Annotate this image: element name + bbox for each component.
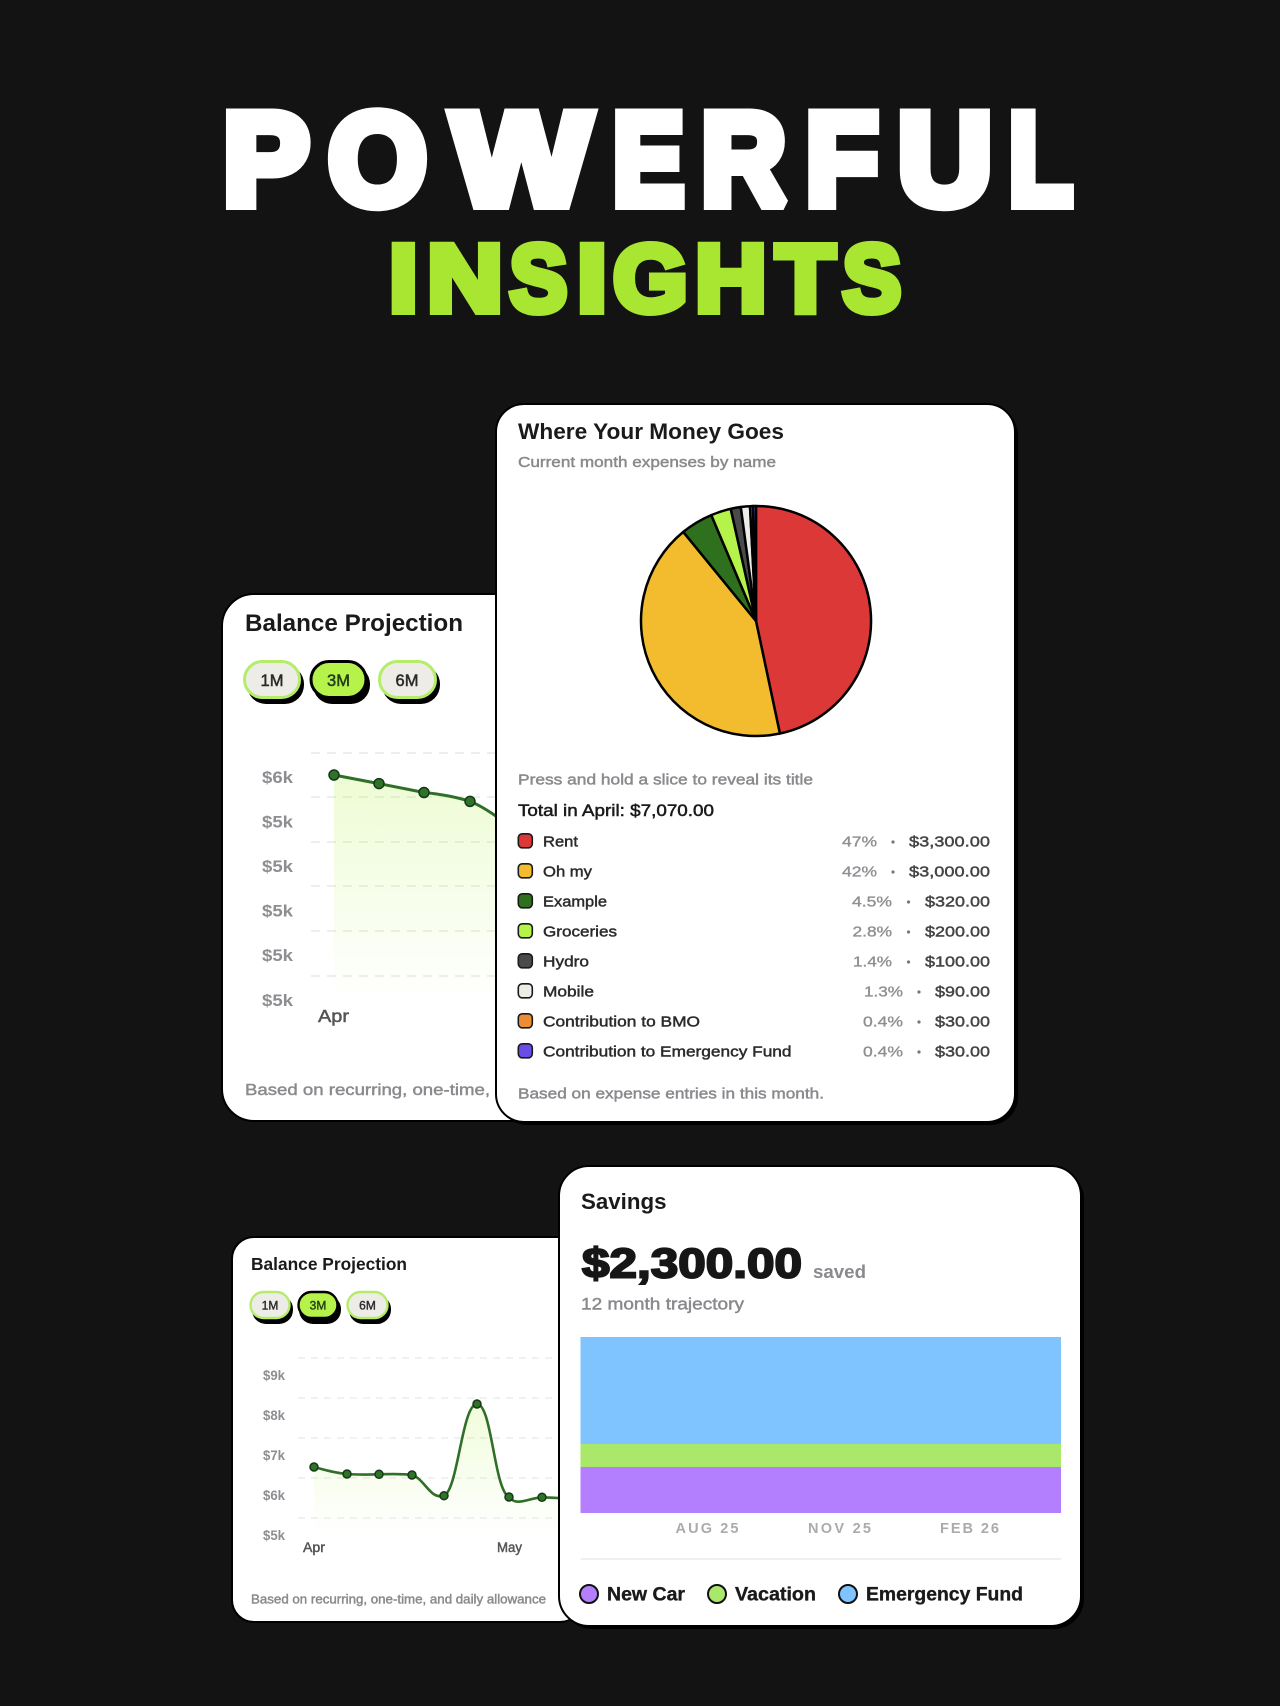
saved amount: $2,300.00	[582, 1240, 802, 1286]
line chart: three month balance: Apr	[318, 1006, 349, 1026]
legend row: contribution to emergency fund	[518, 1044, 990, 1060]
expense legend	[518, 834, 990, 1060]
savings legend: Emergency Fund	[866, 1584, 1023, 1606]
heading: powerful: E	[613, 86, 684, 232]
stacked area chart: NOV 25	[808, 1521, 871, 1537]
line chart: three month balance: May	[497, 1540, 522, 1555]
panel: balance projection small	[232, 1237, 582, 1622]
legend row: rent: Rent	[543, 834, 579, 850]
panel: savings	[559, 1166, 1084, 1629]
heading: insights: S	[510, 226, 567, 332]
heading: powerful: W	[453, 86, 590, 232]
heading: powerful: U	[898, 86, 992, 232]
range selector pills: 1M	[261, 672, 283, 690]
heading: insights: G	[613, 226, 688, 332]
range selector pills: 6M	[396, 672, 418, 690]
line chart: three month balance: $5k	[263, 1528, 285, 1543]
savings legend	[580, 1584, 1023, 1606]
legend row: oh my	[518, 864, 990, 880]
line chart: three month balance: $6k	[263, 1488, 285, 1503]
heading: insights: I	[577, 226, 607, 332]
legend row: contribution to emergency fund: 0.4%	[863, 1044, 903, 1060]
legend row: example: $320.00	[925, 894, 990, 910]
line chart: three month balance: $5k	[262, 946, 294, 965]
line chart: three month balance: $7k	[263, 1448, 285, 1463]
legend row: groceries: 2.8%	[852, 924, 892, 940]
trajectory label: 12 month trajectory	[581, 1294, 745, 1314]
savings legend: Vacation	[735, 1584, 816, 1606]
legend row: rent	[518, 834, 990, 850]
footnote: Based on recurring, one-time,	[245, 1082, 490, 1099]
panel: where your money goes	[496, 404, 1018, 1125]
heading: insights: T	[776, 226, 835, 332]
saved label: saved	[813, 1262, 866, 1282]
legend row: rent: 47%	[842, 834, 877, 850]
legend row: oh my: Oh my	[543, 864, 593, 880]
stacked area chart: AUG 25	[676, 1521, 738, 1537]
heading: powerful: L	[1009, 86, 1072, 232]
legend row: groceries	[518, 924, 990, 940]
savings legend: New Car	[607, 1584, 686, 1606]
legend row: mobile: $90.00	[935, 984, 990, 1000]
legend row: mobile	[518, 984, 990, 1000]
footnote: Based on expense entries in this month.	[518, 1086, 824, 1102]
heading: powerful: O	[328, 86, 427, 232]
legend row: mobile: 1.3%	[864, 984, 903, 1000]
legend row: rent: $3,300.00	[909, 834, 990, 850]
legend row: oh my: 42%	[842, 864, 877, 880]
range selector pills: 3M	[327, 672, 350, 690]
total: Total in April: $7,070.00	[518, 801, 714, 820]
range selector pills: 1M	[262, 1298, 278, 1312]
range selector pills	[244, 662, 440, 704]
legend row: example: Example	[543, 894, 607, 910]
line chart: three month balance	[262, 753, 500, 1026]
heading: powerful: P	[223, 86, 309, 232]
range selector pills: 3M	[310, 1298, 326, 1312]
heading: insights: I	[389, 226, 418, 332]
range selector pills: 6M	[359, 1298, 376, 1312]
heading: insights: S	[843, 226, 901, 332]
hint text: Press and hold a slice to reveal its title	[518, 772, 813, 788]
range selector pills	[250, 1292, 391, 1324]
legend row: hydro: Hydro	[543, 954, 589, 970]
legend row: contribution to bmo	[518, 1014, 990, 1030]
panel heading: Balance Projection	[251, 1254, 407, 1274]
line chart: three month balance: $6k	[262, 768, 294, 787]
panel heading: Balance Projection	[245, 610, 463, 637]
line chart: three month balance: $5k	[262, 812, 294, 832]
legend row: hydro: 1.4%	[853, 954, 892, 970]
heading: insights: N	[427, 226, 503, 332]
stacked area chart	[580, 1337, 1061, 1537]
line chart: three month balance: $5k	[262, 857, 294, 876]
heading: powerful: F	[806, 86, 878, 232]
legend row: contribution to bmo: 0.4%	[863, 1014, 903, 1030]
legend row: contribution to emergency fund: $30.00	[935, 1044, 990, 1060]
legend row: example	[518, 894, 990, 910]
line chart: three month balance: $9k	[263, 1368, 285, 1383]
panel: balance projection large	[222, 594, 542, 1121]
legend row: groceries: $200.00	[925, 924, 990, 940]
line chart: three month balance: $5k	[262, 902, 294, 920]
pie chart	[641, 506, 871, 736]
heading: insights: H	[695, 226, 767, 332]
line chart: three month balance: Apr	[303, 1540, 326, 1555]
line chart: three month balance: $8k	[263, 1408, 285, 1423]
legend row: oh my: $3,000.00	[909, 864, 990, 880]
stacked area chart: FEB 26	[940, 1521, 999, 1537]
panel heading: Where Your Money Goes	[518, 419, 784, 444]
footnote: Based on recurring, one-time, and daily allowance	[251, 1592, 546, 1606]
line chart: three month balance: $5k	[262, 991, 294, 1010]
title	[223, 86, 1072, 332]
line chart: three month balance	[263, 1358, 562, 1555]
subtitle: Current month expenses by name	[518, 454, 776, 471]
panel heading: Savings	[581, 1189, 666, 1214]
legend row: groceries: Groceries	[543, 924, 617, 940]
legend row: hydro: $100.00	[925, 954, 990, 970]
legend row: mobile: Mobile	[543, 984, 594, 1000]
legend row: contribution to bmo: Contribution to BMO	[543, 1014, 700, 1030]
legend row: example: 4.5%	[852, 894, 892, 910]
heading: powerful: R	[701, 86, 786, 232]
legend row: contribution to emergency fund: Contribution to Emergency Fund	[543, 1044, 792, 1060]
legend row: contribution to bmo: $30.00	[935, 1014, 990, 1030]
legend row: hydro	[518, 954, 990, 970]
